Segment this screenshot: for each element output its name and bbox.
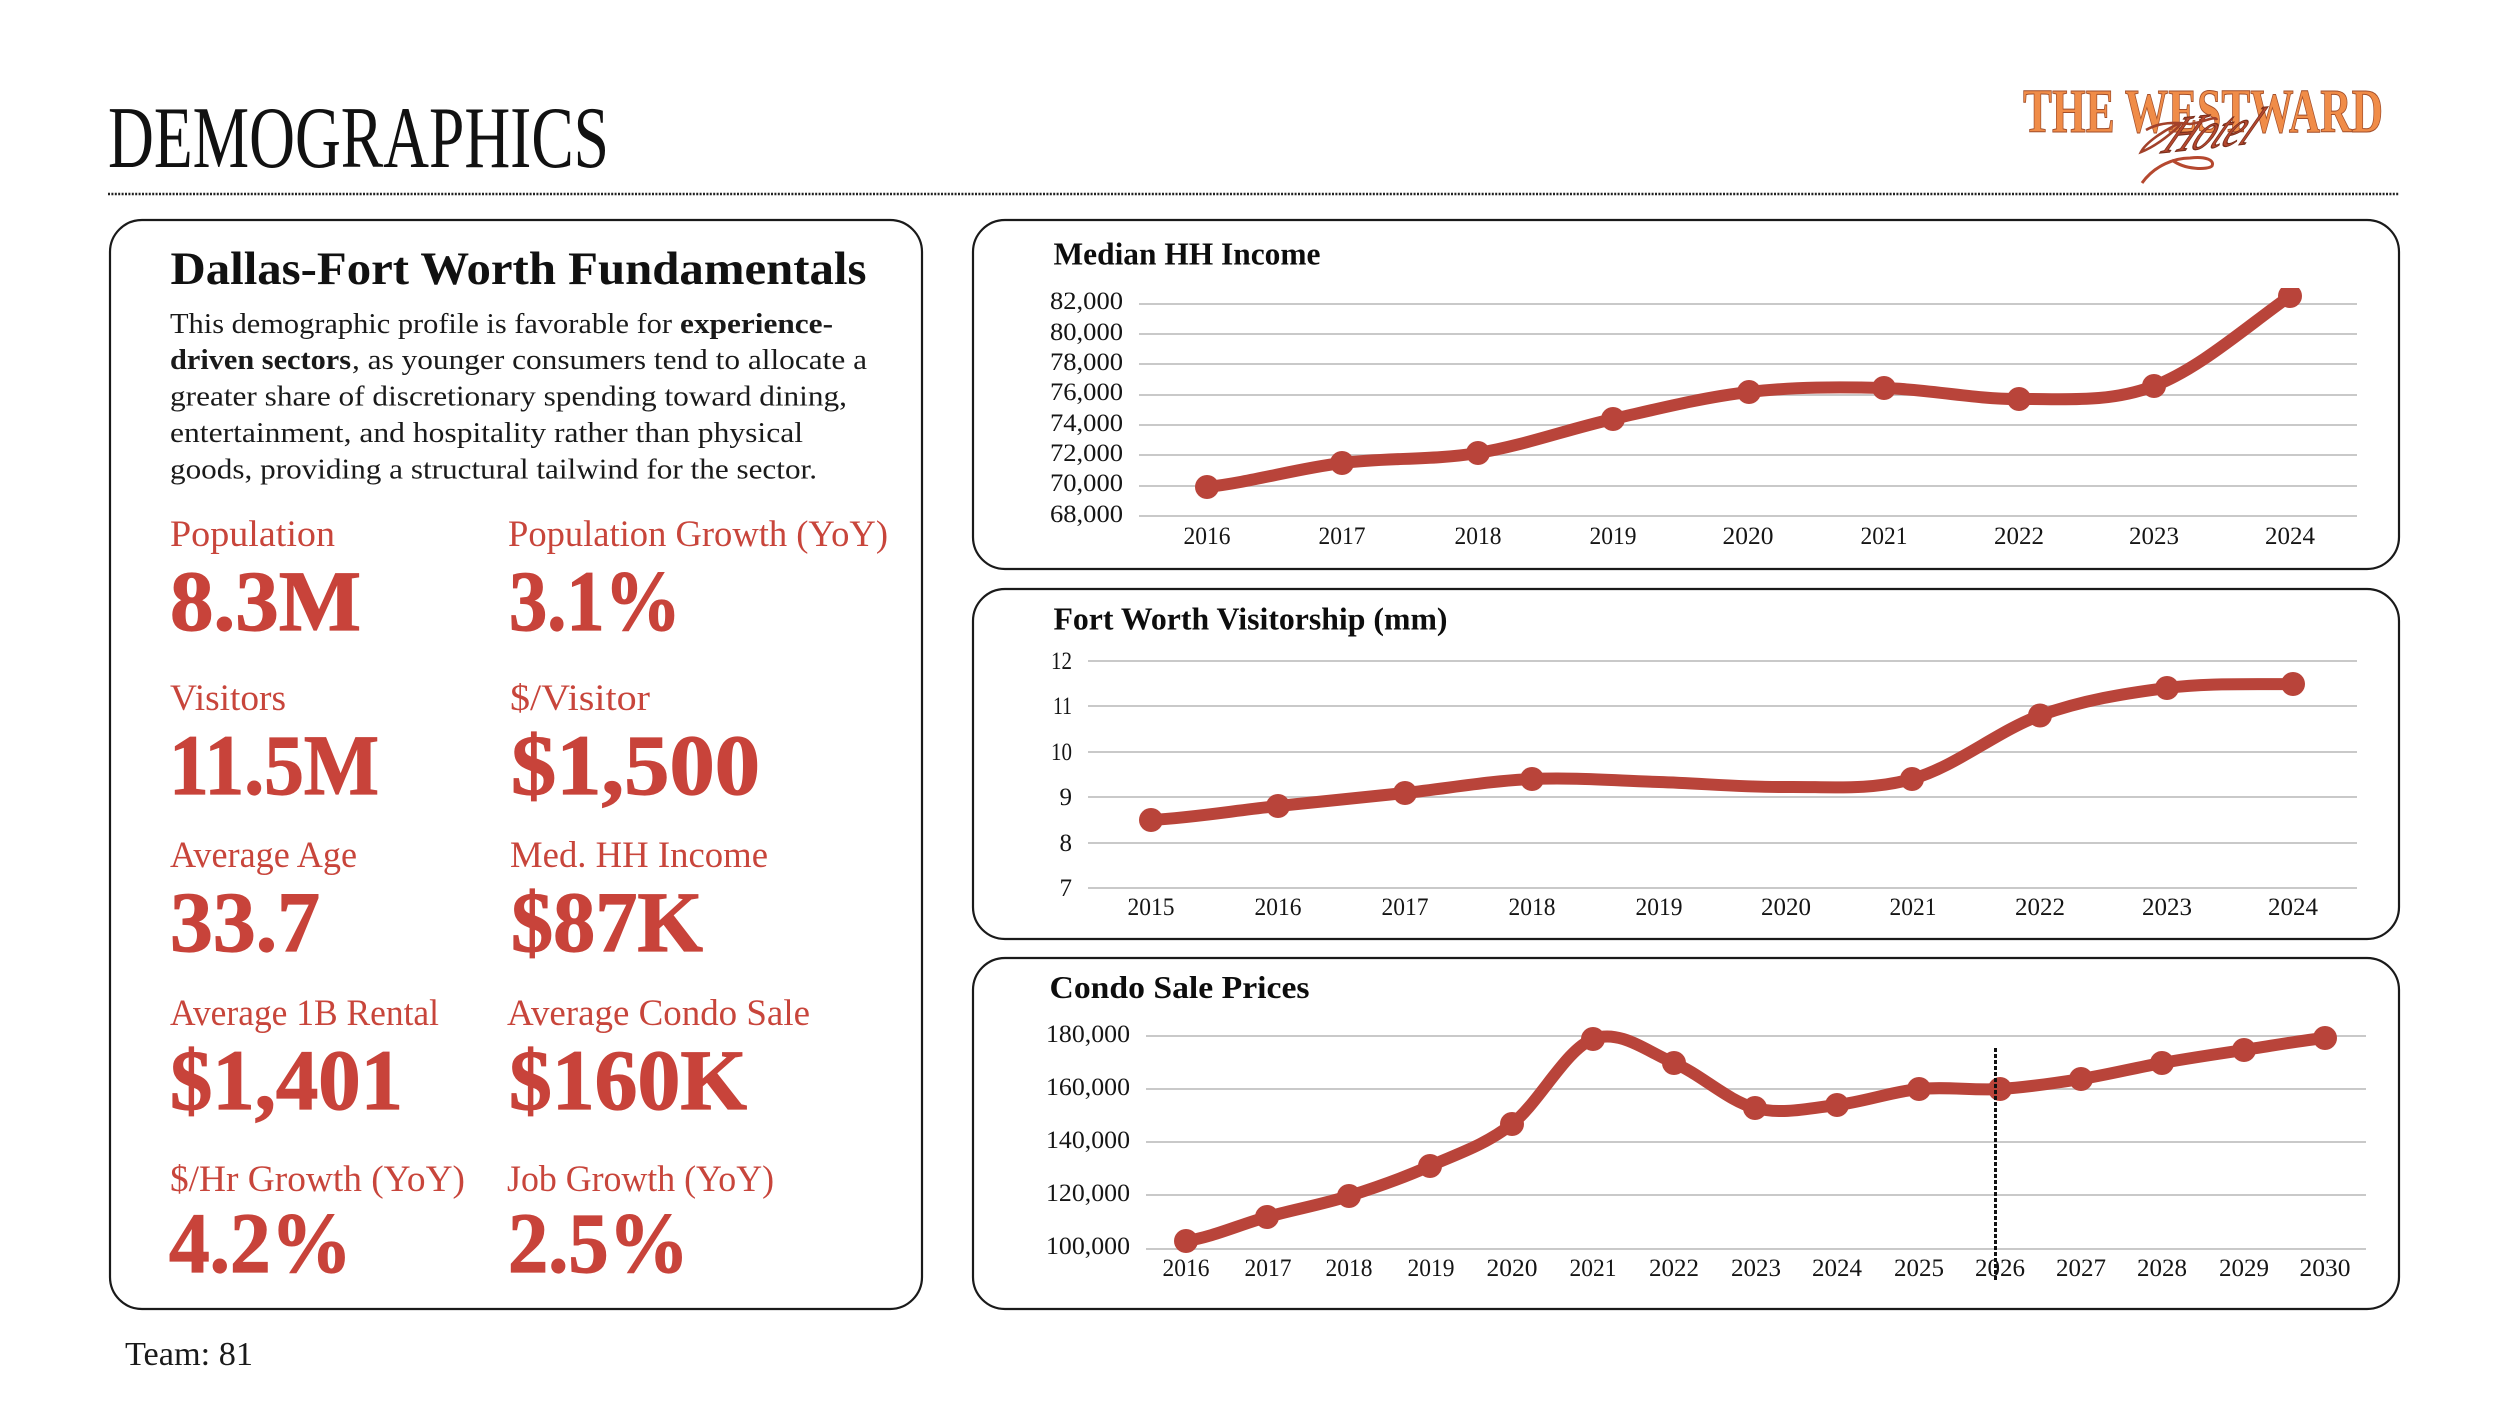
- stat: Average Condo Sale: [507, 993, 810, 1128]
- line chart: condo prices: 2019: [1408, 1255, 1454, 1282]
- stat: Population Growth: Population Growth (YoY): [508, 514, 888, 555]
- body text: driven sectors: [170, 344, 351, 376]
- line chart: visitorship: 2019: [1636, 894, 1682, 921]
- line chart: income: 2019: [1590, 523, 1636, 550]
- stat: $/Hr Growth: $/Hr Growth (YoY): [170, 1159, 465, 1200]
- line chart: income: 70,000: [1050, 470, 1123, 497]
- line chart: income: 80,000: [1050, 319, 1123, 346]
- stat: Visitors: Visitors: [170, 678, 286, 719]
- line chart: income: 2020: [1722, 523, 1774, 550]
- stat: $/Visitor: [510, 678, 760, 813]
- line chart: income: 74,000: [1050, 410, 1123, 437]
- stat: Visitors: 11.5M: [169, 717, 379, 813]
- stat: Med. HH Income: $87K: [511, 874, 703, 970]
- line chart: visitorship: 2017: [1382, 894, 1428, 921]
- line chart: income: 82,000: [1050, 288, 1123, 315]
- line chart: visitorship: [1051, 648, 2357, 921]
- line chart: income: 72,000: [1050, 440, 1123, 467]
- line chart: visitorship: 2024: [2268, 894, 2318, 921]
- line chart: visitorship: 12: [1051, 648, 1072, 675]
- line chart: visitorship: 2016: [1254, 894, 1302, 921]
- panel: Median HH Income: [973, 220, 2399, 569]
- line chart: income: [1050, 284, 2357, 550]
- logo: The Westward Hotel: [2023, 78, 2383, 183]
- line chart: condo prices: 2022: [1649, 1255, 1699, 1282]
- line chart: income: 2024: [2265, 523, 2316, 550]
- chart title: Condo Sale Prices: [1050, 969, 1310, 1005]
- stat: Average 1B Rental: [170, 993, 439, 1128]
- stat: $/Hr Growth: [169, 1159, 465, 1291]
- stat: Med. HH Income: [510, 835, 768, 970]
- stat: Visitors: [169, 678, 379, 813]
- line chart: condo prices: 2018: [1326, 1255, 1372, 1282]
- stat: $/Hr Growth: 4.2%: [169, 1195, 352, 1291]
- line chart: condo prices: [1046, 1021, 2366, 1282]
- panel: Condo Sale Prices: [973, 958, 2399, 1309]
- line chart: visitorship: 2022: [2015, 894, 2065, 921]
- line chart: visitorship: 9: [1060, 784, 1072, 811]
- line chart: condo prices: 100,000: [1046, 1233, 1130, 1260]
- chart title: Fort Worth Visitorship (mm): [1054, 600, 1448, 636]
- stat: Job Growth: [507, 1159, 774, 1291]
- line chart: income: 2017: [1318, 523, 1366, 550]
- line chart: visitorship: 2018: [1508, 894, 1556, 921]
- stat: Job Growth: 2.5%: [508, 1195, 689, 1291]
- line chart: condo prices: 2020: [1486, 1255, 1538, 1282]
- line chart: condo prices: 2025: [1894, 1255, 1944, 1282]
- line chart: visitorship: 2020: [1761, 894, 1811, 921]
- line chart: condo prices: 2028: [2137, 1255, 2187, 1282]
- stat: Population Growth: 3.1%: [509, 553, 681, 649]
- heading: Dallas-Fort Worth Fundamentals: [170, 243, 866, 295]
- line chart: income: 78,000: [1050, 349, 1123, 376]
- stat: $/Visitor: $1,500: [511, 717, 760, 813]
- stat: $/Visitor: $/Visitor: [510, 678, 650, 719]
- line chart: condo prices: 180,000: [1046, 1021, 1130, 1048]
- body text: experience-: [680, 308, 833, 340]
- stat: Med. HH Income: Med. HH Income: [510, 835, 768, 876]
- line chart: visitorship: 7: [1060, 875, 1072, 902]
- line chart: visitorship: 8: [1060, 830, 1072, 857]
- title: DEMOGRAPHICS: [108, 90, 609, 187]
- line chart: condo prices: 2017: [1244, 1255, 1292, 1282]
- body text: greater share of discretionary spending toward dining,: [170, 380, 847, 412]
- line chart: income: 2016: [1184, 523, 1230, 550]
- stat: Average Age: 33.7: [170, 874, 320, 970]
- line chart: income: 2023: [2129, 523, 2179, 550]
- line chart: income: 2018: [1454, 523, 1502, 550]
- stat: Average Age: [170, 835, 357, 970]
- body text: [170, 308, 867, 486]
- line chart: income: 2022: [1994, 523, 2044, 550]
- line chart: visitorship: 2015: [1128, 894, 1174, 921]
- stat: Average Age: Average Age: [170, 835, 357, 876]
- line chart: condo prices: 160,000: [1046, 1074, 1130, 1101]
- line chart: condo prices: 2021: [1570, 1255, 1616, 1282]
- line chart: condo prices: 2026: [1975, 1255, 2025, 1282]
- line chart: condo prices: 120,000: [1046, 1180, 1130, 1207]
- logo: The Westward Hotel: Hotel: [2152, 97, 2274, 165]
- line chart: condo prices: 2030: [2300, 1255, 2350, 1282]
- stat: Population Growth: [508, 514, 888, 649]
- line chart: condo prices: 2029: [2219, 1255, 2269, 1282]
- body text: entertainment, and hospitality rather than physical: [170, 417, 803, 449]
- body text: goods, providing a structural tailwind for the sector.: [170, 454, 817, 486]
- stat: Average 1B Rental: $1,401: [170, 1032, 403, 1128]
- line chart: income: 2021: [1860, 523, 1908, 550]
- body text: This demographic profile is favorable for: [170, 308, 672, 340]
- stat: Job Growth: Job Growth (YoY): [507, 1159, 774, 1200]
- panel: Fort Worth Visitorship: [973, 589, 2399, 939]
- line chart: visitorship: 11: [1053, 693, 1072, 720]
- stat: Average 1B Rental: Average 1B Rental: [170, 993, 439, 1034]
- stat: Population: 8.3M: [170, 553, 361, 649]
- line chart: condo prices: 2016: [1162, 1255, 1210, 1282]
- stat: Average Condo Sale: Average Condo Sale: [507, 993, 810, 1034]
- team label: Team: 81: [125, 1336, 253, 1373]
- line chart: condo prices: 2024: [1812, 1255, 1862, 1282]
- line chart: visitorship: 2023: [2142, 894, 2192, 921]
- chart title: Median HH Income: [1054, 236, 1320, 272]
- line chart: condo prices: 140,000: [1046, 1127, 1130, 1154]
- stat: Population: Population: [170, 514, 335, 555]
- line chart: condo prices: 2023: [1731, 1255, 1781, 1282]
- line chart: income: 76,000: [1050, 379, 1123, 406]
- stat: Average Condo Sale: $160K: [509, 1032, 747, 1128]
- body text: , as younger consumers tend to allocate a: [352, 344, 867, 376]
- line chart: visitorship: 10: [1051, 739, 1072, 766]
- panel: Dallas-Fort Worth fundamentals: [110, 220, 922, 1309]
- line chart: income: 68,000: [1050, 501, 1123, 528]
- line chart: condo prices: 2027: [2056, 1255, 2106, 1282]
- line chart: visitorship: 2021: [1890, 894, 1936, 921]
